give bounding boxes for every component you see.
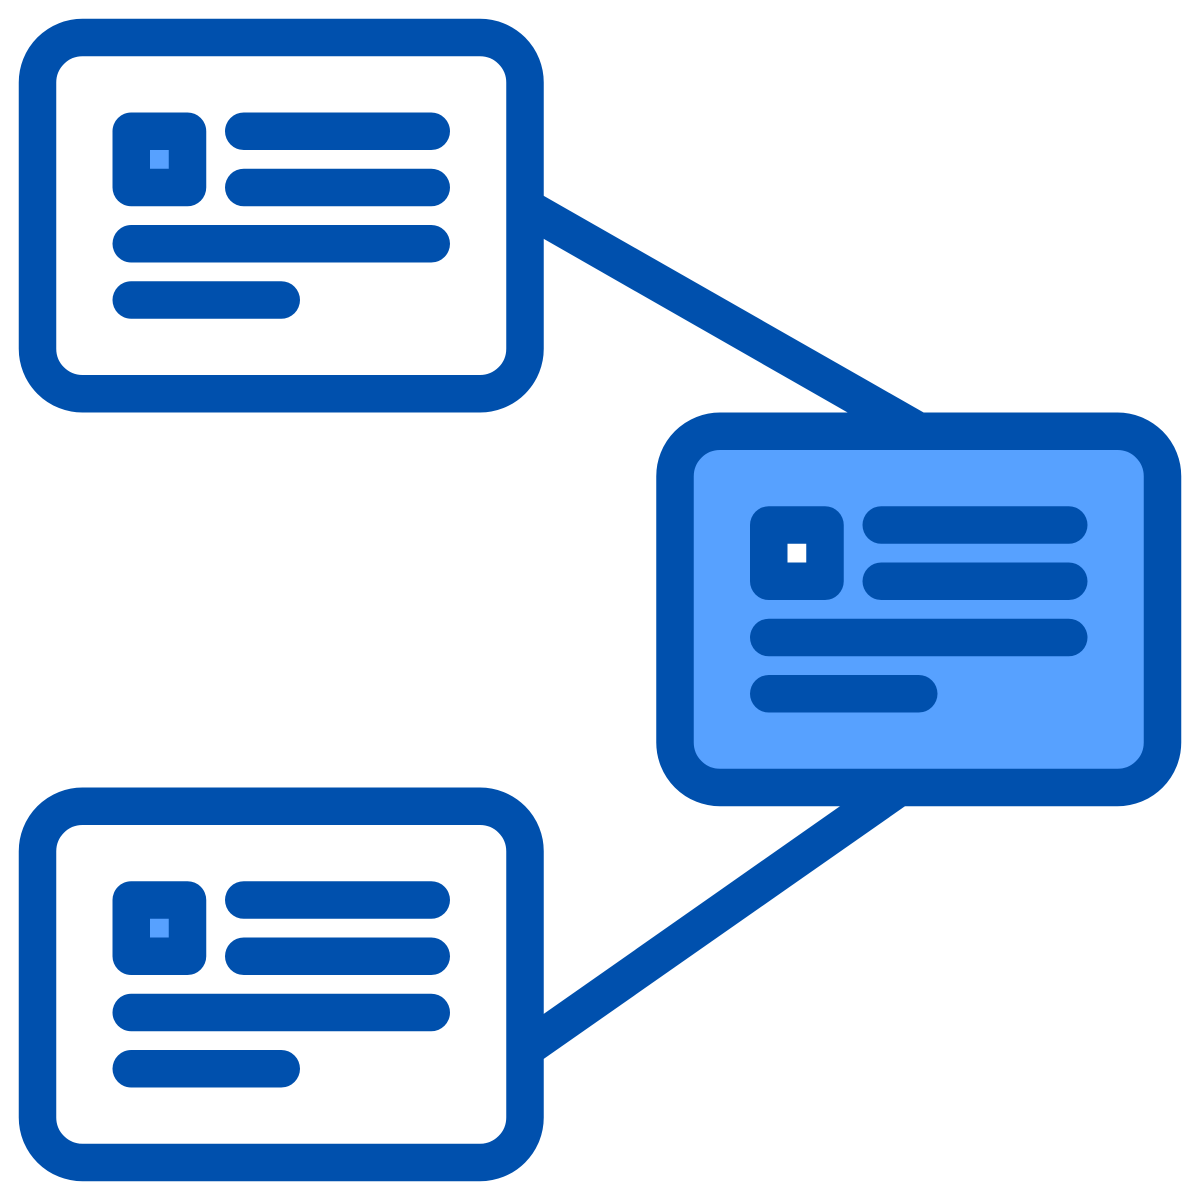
text lines: bottom card [112,881,450,1088]
text lines: highlighted card [750,506,1088,712]
text lines: top card [112,112,450,319]
icon: highlighted card square [750,506,844,600]
icon: bottom card square [112,881,206,975]
panel: highlighted right card [675,431,1162,788]
panel: bottom left card [38,806,525,1162]
icon: top card square [112,112,206,206]
arrow: connector from bottom card to highlighted card [530,806,906,1068]
arrow: connector from top card to highlighted card [530,188,924,413]
panel: top left card [38,38,525,394]
